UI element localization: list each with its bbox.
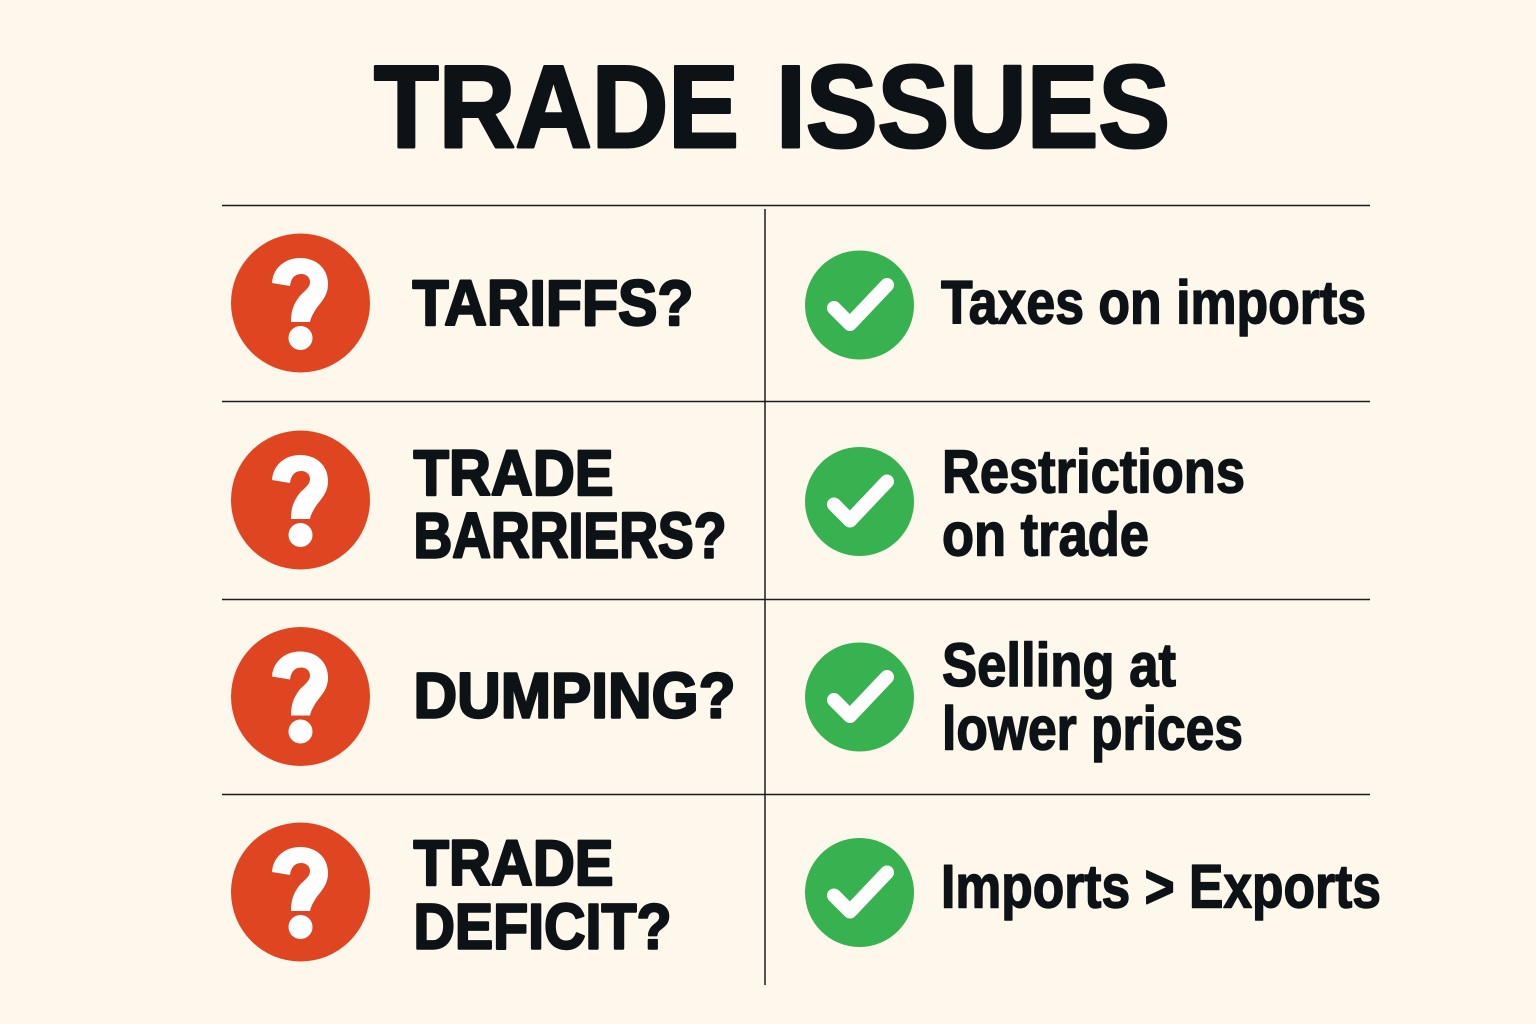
icon: question mark — [231, 430, 370, 570]
icon: check mark — [805, 447, 914, 556]
label: trade barriers: TRADE — [414, 437, 614, 509]
definition: tariffs: Taxes on imports — [941, 268, 1366, 336]
title: TRADE — [374, 41, 739, 172]
definition: trade deficit: Imports > Exports — [941, 852, 1381, 920]
label: trade deficit: DEFICIT? — [414, 890, 672, 962]
definition: dumping: lower prices — [942, 694, 1243, 762]
definition: trade barriers: on trade — [942, 500, 1149, 568]
row: dumping — [231, 627, 1243, 766]
icon: question mark — [231, 627, 370, 766]
definition: dumping — [942, 631, 1243, 762]
row: tariffs — [231, 234, 1366, 372]
label: trade barriers: BARRIERS? — [414, 500, 726, 572]
row: trade barriers — [231, 430, 1245, 572]
definition: trade barriers — [942, 438, 1245, 568]
icon: question mark — [231, 822, 370, 962]
title: ISSUES — [776, 41, 1170, 172]
label: trade barriers — [414, 437, 726, 572]
icon: question mark — [231, 234, 370, 372]
definition: trade barriers: Restrictions — [942, 438, 1245, 506]
icon: check mark — [805, 642, 914, 752]
label: trade deficit — [414, 827, 672, 962]
icon: check mark — [805, 250, 914, 360]
title — [374, 41, 1170, 172]
definition: dumping: Selling at — [942, 631, 1176, 699]
label: trade deficit: TRADE — [414, 827, 614, 899]
row: trade deficit — [231, 822, 1381, 962]
icon: check mark — [805, 838, 914, 947]
label: tariffs: TARIFFS? — [412, 267, 694, 339]
label: dumping: DUMPING? — [414, 660, 736, 732]
